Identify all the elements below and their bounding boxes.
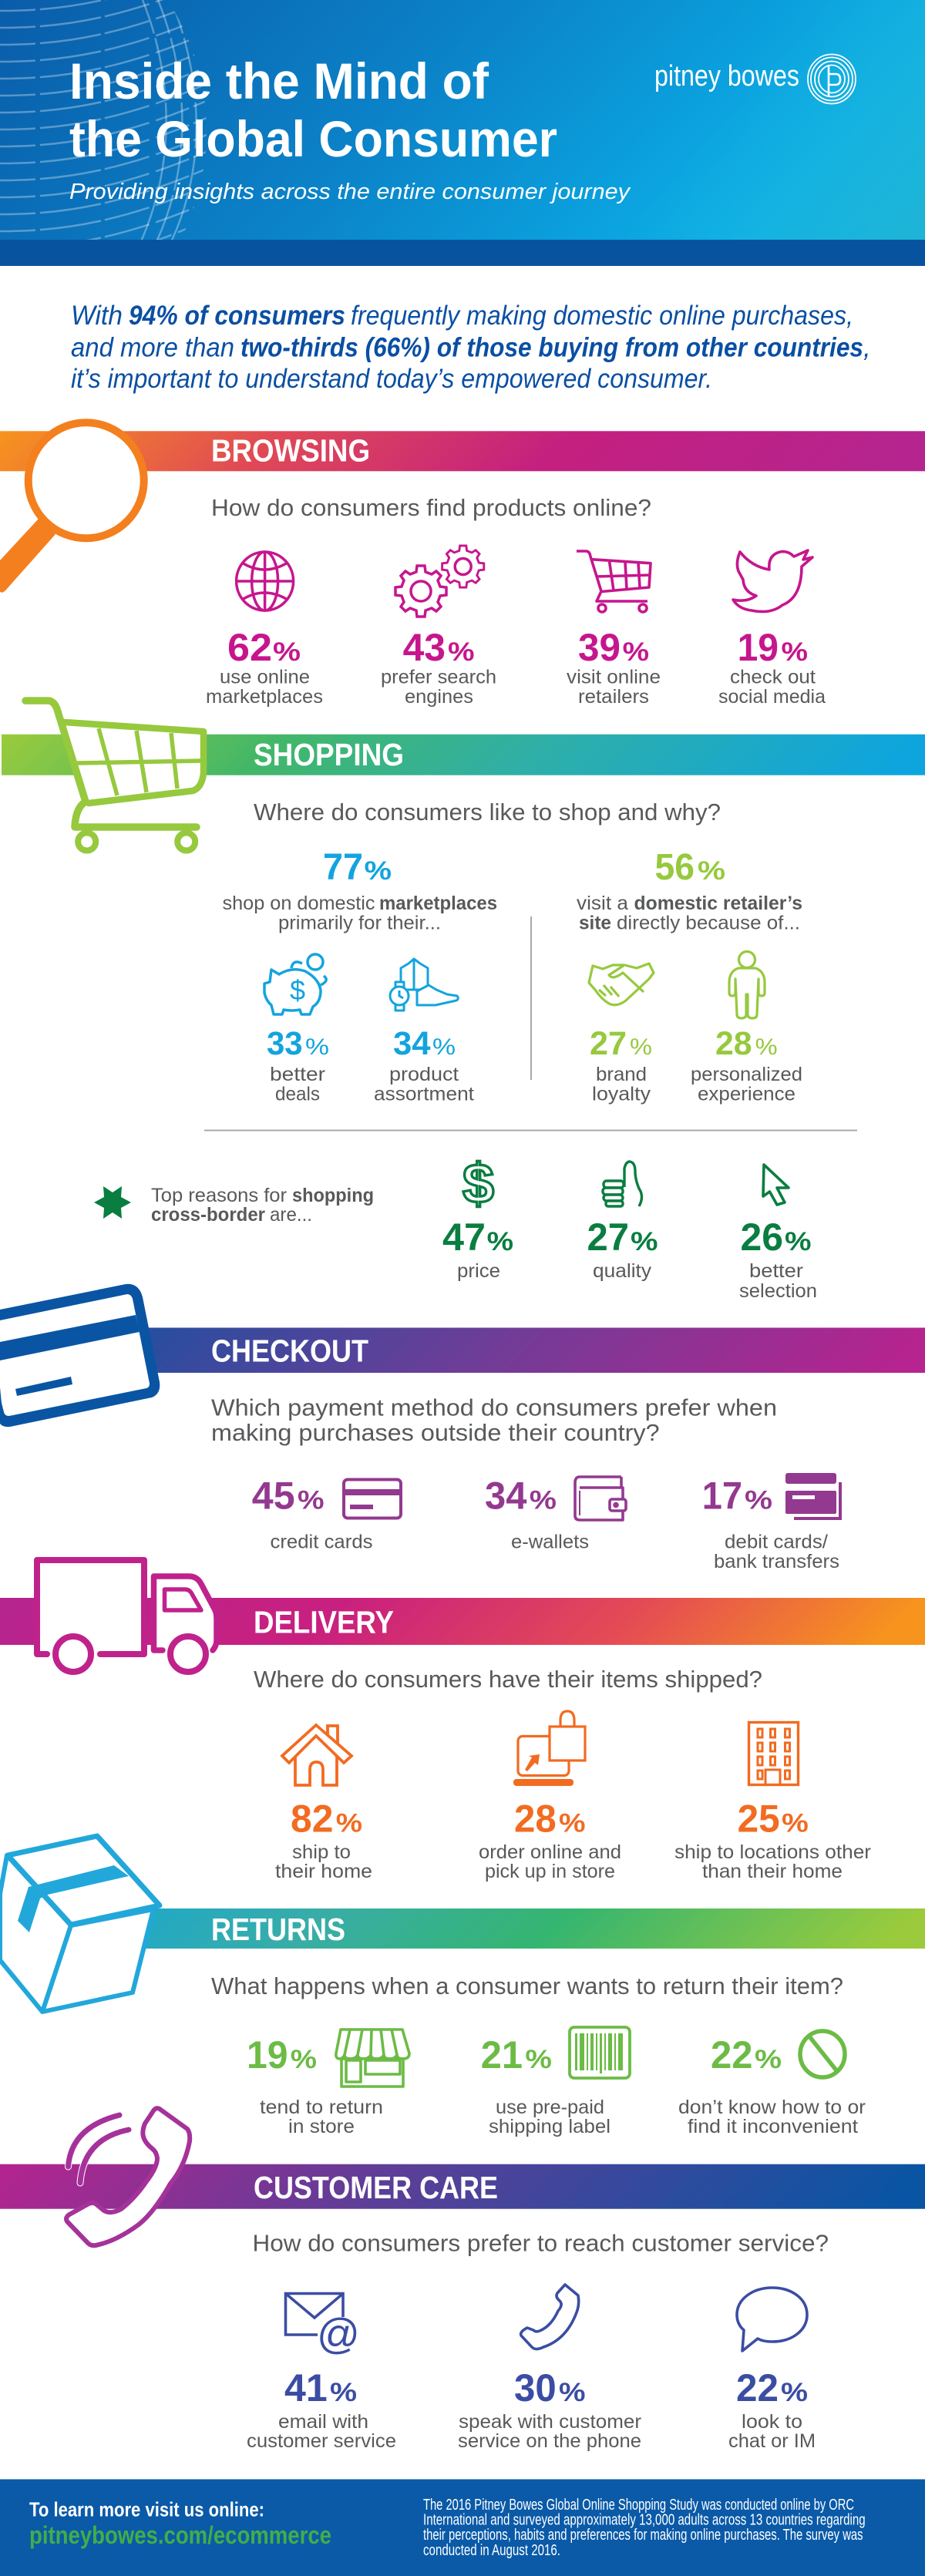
stat: 28% personalized experience: 28 [715, 1025, 752, 1062]
stat: 34% product assortment: product [389, 1064, 459, 1085]
stat: 27% brand loyalty: 27 [590, 1025, 627, 1062]
stat: 41% email: % [330, 2378, 357, 2407]
stat: 26% better selection: 26 [740, 1216, 783, 1259]
stat: 33% better deals [264, 954, 329, 1105]
icon: envelope with at sign [285, 2294, 360, 2358]
stat: 28% pick up in store [479, 1711, 621, 1882]
heading: checkout: CHECKOUT [211, 1333, 368, 1369]
icon: cardboard box [0, 1836, 160, 2012]
stat: 62% marketplaces: 62 [227, 626, 272, 669]
stat: 34% product assortment: 34 [393, 1025, 431, 1062]
icon: credit card [0, 1284, 160, 1427]
title: Inside the Mind of [69, 52, 489, 109]
stat: 27% quality: 27 [587, 1216, 629, 1259]
stat: 22% chat: chat or IM [728, 2430, 816, 2452]
stat: 43% search engines: engines [405, 686, 473, 708]
icon: barcode [570, 2027, 630, 2078]
stat: 41% email: email with [278, 2411, 368, 2433]
stat: 22% chat: % [781, 2378, 808, 2407]
stat: 19% return in store [247, 2030, 409, 2137]
stat: 47% price: % [487, 1227, 513, 1256]
icon: person [729, 951, 765, 1018]
stat: 39% online retailers: visit online [567, 666, 661, 688]
stat: 26% better selection: % [785, 1227, 811, 1256]
stat: 82% ship to home: 82 [291, 1797, 333, 1841]
stat: 45% credit cards: % [298, 1486, 324, 1515]
stat: 39% online retailers: retailers [578, 686, 649, 708]
stat: 43% search engines: 43 [403, 626, 446, 669]
stat: 82% ship to home: % [336, 1808, 362, 1838]
stat: 34% product assortment: assortment [374, 1084, 474, 1105]
stat: 25% other locations: than their home [702, 1861, 843, 1882]
heading: customer care: CUSTOMER CARE [254, 2170, 498, 2205]
marketplaces column: marketplaces [379, 893, 497, 914]
stat: 22% inconvenient: 22 [711, 2033, 752, 2077]
retailer column [577, 847, 802, 1105]
stat: 17% debit cards and bank transfers [702, 1473, 840, 1572]
stat: 30% phone [458, 2285, 641, 2452]
question: How do consumers prefer to reach customer service? [253, 2229, 829, 2257]
icon: storefront [336, 2030, 409, 2087]
stat: 17% debit cards and bank transfers: debit cards/ [725, 1531, 828, 1552]
retailer column: 56 [655, 847, 695, 888]
stat: 21% pre-paid label: shipping label [489, 2116, 610, 2137]
marketplaces column [222, 847, 497, 1105]
stat: 41% email: 41 [284, 2366, 328, 2410]
heading: shopping: SHOPPING [254, 737, 404, 772]
stat: 33% better deals: better [270, 1064, 325, 1085]
call to action: To learn more visit us online: [29, 2497, 264, 2521]
marketplaces column: 77 [323, 847, 363, 888]
cross-border lead text: Top reasons for [151, 1185, 287, 1206]
question: making purchases outside their country? [211, 1419, 660, 1446]
stat: 21% pre-paid label [481, 2027, 630, 2137]
stat: 43% search engines [381, 546, 496, 708]
stat: 19% return in store: tend to return [260, 2097, 383, 2118]
icon: telephone handset [66, 2108, 190, 2245]
icon: envelope with at sign: @ [317, 2309, 360, 2358]
logo: pitney bowes: pitney bowes [654, 60, 799, 92]
stat: 21% pre-paid label: 21 [481, 2033, 523, 2077]
cross-border lead text: shopping [292, 1185, 374, 1206]
stat: 19% return in store: % [291, 2045, 317, 2074]
marketplaces column: primarily for their... [278, 913, 441, 934]
retailer column: visit a [577, 893, 628, 914]
stat: 47% price [442, 1153, 513, 1282]
stat: 21% pre-paid label: use pre-paid [496, 2097, 604, 2118]
band: shopping [2, 735, 925, 775]
stat: 19% social media: % [782, 637, 808, 667]
band: checkout [0, 1327, 925, 1373]
panel: shopping [2, 701, 925, 1302]
stat: 28% personalized experience: personalized [691, 1064, 802, 1085]
stat: 30% phone: % [559, 2378, 586, 2407]
stat: 17% debit cards and bank transfers: % [745, 1486, 772, 1515]
cross-border lead text [151, 1185, 374, 1226]
stat: 41% email [247, 2294, 396, 2452]
row divider [204, 1130, 857, 1132]
stat: 22% inconvenient: % [755, 2045, 782, 2074]
stat: 28% personalized experience: % [755, 1034, 778, 1060]
stat: 27% brand loyalty: loyalty [592, 1084, 651, 1105]
stat: 82% ship to home: ship to [292, 1841, 351, 1863]
stat: 34% e-wallets: e-wallets [511, 1531, 589, 1552]
icon: prohibited sign [800, 2031, 845, 2077]
icon: speech bubble [737, 2288, 807, 2351]
stat: 45% credit cards [252, 1474, 401, 1552]
stat: 28% pick up in store: order online and [479, 1841, 621, 1863]
stat: 34% product assortment: % [432, 1034, 456, 1060]
stat: 19% social media: social media [718, 686, 826, 708]
icon: delivery truck [37, 1560, 217, 1672]
icon: debit card [785, 1473, 840, 1518]
question: Which payment method do consumers prefer when [211, 1394, 777, 1421]
call to action [29, 2497, 331, 2549]
stat: 33% better deals: $ [290, 974, 305, 1006]
intro paragraph: it’s important to understand today’s empowered consumer. [71, 364, 712, 394]
stat: 39% online retailers: 39 [578, 626, 621, 669]
stat: 22% inconvenient: don’t know how to or [678, 2097, 866, 2118]
icon: large shopping cart [25, 701, 207, 851]
retailer column: directly because of... [617, 913, 800, 934]
band: delivery [0, 1598, 925, 1645]
panel: returns [0, 1836, 925, 2137]
intro paragraph: , [863, 333, 871, 362]
header banner [0, 0, 925, 266]
stat: 22% chat [728, 2288, 816, 2452]
stat: 28% pick up in store: pick up in store [485, 1861, 615, 1882]
heading: delivery: DELIVERY [254, 1605, 394, 1640]
panel: delivery [0, 1560, 925, 1882]
question: Where do consumers like to shop and why? [254, 799, 721, 826]
icon: shirt, watch and shoe [390, 959, 458, 1011]
stat: 34% product assortment [374, 959, 474, 1105]
stat: 26% better selection: better [749, 1260, 803, 1282]
icon: dollar sign: $ [462, 1153, 494, 1215]
heading: browsing: BROWSING [211, 433, 370, 469]
intro paragraph: 94% of consumers [129, 301, 345, 331]
stat: 34% e-wallets: % [530, 1486, 557, 1515]
icon: twitter bird [733, 550, 812, 611]
marketplaces column: % [364, 856, 392, 886]
stat: 30% phone: speak with customer [459, 2411, 641, 2433]
stat: 26% better selection [739, 1165, 817, 1302]
icon: cursor arrow [763, 1165, 789, 1205]
stat: 27% quality [587, 1162, 658, 1282]
cross-border lead text: cross-border [151, 1204, 265, 1226]
stat: 47% price: price [457, 1260, 500, 1282]
stat: 27% brand loyalty: % [630, 1034, 652, 1060]
survey note [423, 2497, 866, 2559]
stat: 25% other locations: 25 [738, 1797, 780, 1841]
title [69, 52, 557, 167]
icon: piggy bank [264, 954, 326, 1014]
question: How do consumers find products online? [211, 494, 651, 521]
stat: 62% marketplaces: % [273, 637, 301, 667]
icon: thumbs up [603, 1162, 641, 1206]
band: customer care [0, 2164, 925, 2209]
question [211, 1394, 777, 1446]
stat: 43% search engines: % [448, 637, 475, 667]
survey note: conducted in August 2016. [423, 2542, 560, 2559]
stat: 45% credit cards: 45 [252, 1474, 295, 1517]
stat: 28% personalized experience: experience [698, 1084, 796, 1105]
marketplaces column: shop on domestic [222, 893, 375, 914]
intro paragraph: two-thirds (66%) of those buying from other countries [240, 333, 863, 362]
stat: 27% quality: quality [593, 1260, 652, 1282]
icon: handshake [589, 963, 654, 1005]
stat: 82% ship to home: their home [275, 1861, 372, 1882]
call to action: pitneybowes.com/ecommerce [29, 2521, 331, 2549]
stat: 43% search engines: prefer search [381, 666, 496, 688]
panel: customer care [0, 2108, 925, 2452]
icon: office building [749, 1722, 799, 1785]
stat: 25% other locations: % [782, 1808, 809, 1838]
subtitle: Providing insights across the entire consumer journey [69, 180, 631, 204]
stat: 19% social media: 19 [738, 626, 779, 669]
footer [0, 2479, 925, 2576]
stat: 17% debit cards and bank transfers: bank transfers [714, 1551, 839, 1572]
icon: gears [395, 546, 484, 617]
stat: 19% social media: check out [730, 666, 816, 688]
retailer column: % [698, 856, 725, 886]
logo: pitney bowes [654, 54, 856, 103]
stat: 27% quality: % [631, 1227, 658, 1256]
stat: 19% return in store: in store [288, 2116, 355, 2137]
band: returns [0, 1908, 925, 1949]
stat: 62% marketplaces: marketplaces [206, 686, 323, 708]
icon: wallet [575, 1477, 626, 1520]
stat: 34% e-wallets: 34 [485, 1474, 527, 1517]
heading: returns: RETURNS [211, 1912, 345, 1947]
band: browsing [0, 431, 925, 471]
stat: 62% marketplaces: use online [220, 666, 310, 688]
stat: 45% credit cards: credit cards [270, 1531, 373, 1552]
cross-border lead text: are... [270, 1204, 312, 1226]
stat: 82% ship to home [275, 1725, 372, 1882]
stat: 30% phone: service on the phone [458, 2430, 641, 2452]
stat: 27% brand loyalty [589, 963, 654, 1105]
stat: 33% better deals: % [305, 1034, 329, 1060]
intro paragraph: frequently making domestic online purchases, [351, 301, 853, 331]
intro paragraph: With [71, 301, 123, 331]
stat: 34% e-wallets [485, 1474, 626, 1552]
icon: star [94, 1186, 131, 1219]
stat: 25% other locations: ship to locations other [674, 1841, 871, 1863]
panel: checkout [0, 1284, 925, 1572]
icon: magnifying glass [0, 422, 144, 593]
stat: 27% brand loyalty: brand [596, 1064, 647, 1085]
icon: globe [236, 552, 294, 610]
stat: 19% return in store: 19 [247, 2033, 288, 2077]
stat: 47% price: 47 [442, 1216, 486, 1259]
retailer column: site [579, 913, 611, 934]
stat: 26% better selection: selection [739, 1280, 817, 1302]
stat: 28% pick up in store: 28 [514, 1797, 557, 1841]
icon: shopping cart [577, 551, 651, 612]
question: What happens when a consumer wants to return their item? [211, 1972, 843, 1999]
icon: credit card outline [344, 1480, 401, 1518]
stat: 62% marketplaces [206, 552, 323, 708]
stat: 33% better deals: deals [275, 1084, 320, 1105]
stat: 22% chat: 22 [736, 2366, 779, 2410]
stat: 22% inconvenient: find it inconvenient [688, 2116, 858, 2137]
retailer column: domestic retailer’s [634, 893, 802, 914]
intro paragraph [71, 301, 871, 394]
stat: 39% online retailers [567, 551, 661, 708]
stat: 22% chat: look to [742, 2411, 802, 2433]
title: the Global Consumer [69, 110, 557, 167]
intro paragraph: and more than [71, 333, 234, 362]
stat: 21% pre-paid label: % [525, 2045, 552, 2074]
stat: 22% inconvenient [678, 2031, 866, 2137]
stat: 39% online retailers: % [623, 637, 649, 667]
stat: 25% other locations [674, 1722, 871, 1882]
stat: 33% better deals: 33 [267, 1025, 303, 1062]
panel: browsing [0, 422, 925, 708]
stat: 30% phone: 30 [514, 2366, 557, 2410]
stat: 28% personalized experience [691, 951, 802, 1105]
column divider [530, 916, 532, 1080]
icon: house [282, 1725, 352, 1785]
icon: tablet and shopping bag [513, 1711, 585, 1786]
stat: 28% pick up in store: % [559, 1808, 586, 1838]
stat: 17% debit cards and bank transfers: 17 [702, 1474, 742, 1517]
icon: phone [521, 2285, 579, 2349]
stat: 19% social media [718, 550, 826, 708]
question: Where do consumers have their items shipped? [254, 1666, 762, 1693]
stat: 41% email: customer service [247, 2430, 396, 2452]
